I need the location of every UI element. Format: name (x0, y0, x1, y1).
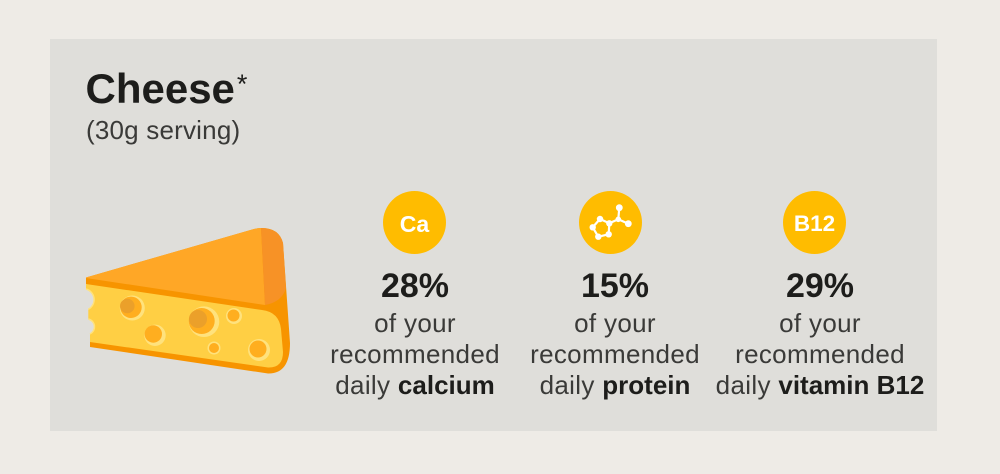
cheese holes (120, 296, 270, 361)
calcium description: recommended (330, 339, 500, 369)
column: calcium (330, 191, 500, 400)
B12 description: daily vitamin B12 (716, 370, 924, 400)
B12 percentage: 29% (786, 267, 854, 305)
calcium description: of your (374, 308, 456, 338)
protein percentage: 15% (581, 267, 649, 305)
icon: B12 badge: B12 (794, 211, 835, 236)
serving size text: (30g serving) (86, 115, 240, 145)
B12 description: recommended (735, 339, 905, 369)
cheese notch highlights (86, 289, 95, 334)
title: * (237, 69, 248, 99)
icon: B12 badge (783, 191, 846, 254)
calcium description: daily calcium (335, 370, 495, 400)
protein description: recommended (530, 339, 700, 369)
column: vitamin B12 (716, 191, 924, 400)
calcium percentage: 28% (381, 267, 449, 305)
icon: calcium badge: Ca (400, 211, 429, 237)
panel: cheese nutrition card (50, 39, 937, 431)
title: Cheese (86, 65, 235, 112)
protein description: daily protein (540, 370, 690, 400)
B12 description: of your (779, 308, 861, 338)
icon: calcium badge (383, 191, 446, 254)
column: protein (530, 191, 700, 400)
icon: cheese wedge (86, 228, 290, 374)
protein description: of your (574, 308, 656, 338)
icon: protein molecule badge (579, 191, 642, 254)
